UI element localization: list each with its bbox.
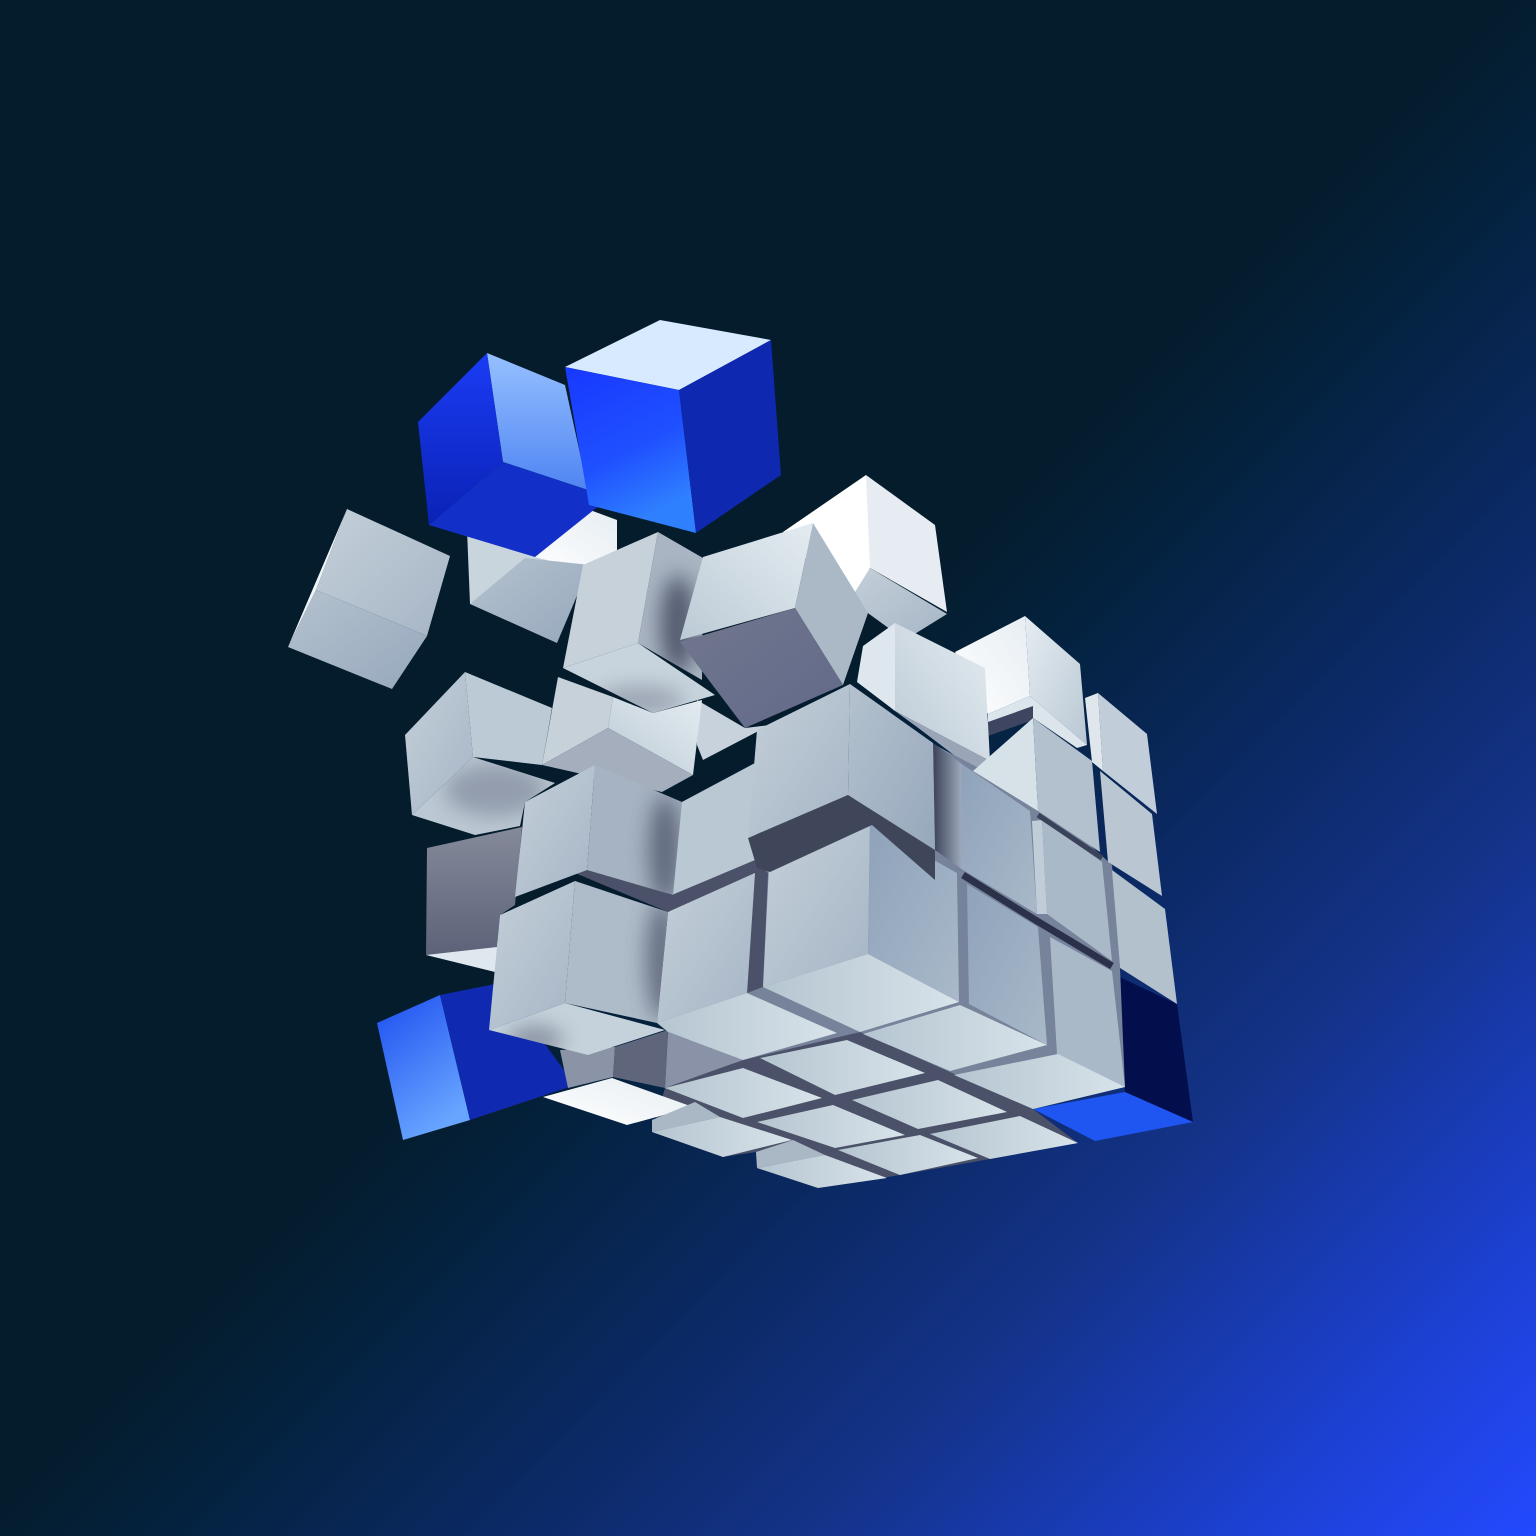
bottom grid of cube faces <box>543 993 1125 1188</box>
bottom grid gap backing <box>652 1032 1078 1188</box>
cube: white back right <box>783 475 947 640</box>
cube: lower left column <box>657 873 755 1023</box>
cube: blue upper left <box>418 353 600 557</box>
cube: blue top <box>565 320 781 533</box>
cube: far right edge top <box>1085 693 1157 814</box>
cube: large tilted with dark underside <box>680 523 868 728</box>
main cube right columns <box>963 815 1125 1087</box>
cube: left upper front <box>515 765 682 905</box>
cube: left middle column <box>672 763 757 895</box>
cube: navy back corner <box>1033 975 1193 1141</box>
cube: silver right of centre <box>857 623 990 771</box>
cube: central large <box>763 824 959 1032</box>
cube: small rear fragment <box>697 700 770 760</box>
cube: silver mid fragment <box>542 677 702 792</box>
cube: silver mid left <box>405 672 555 835</box>
cube: dark shaded left <box>426 827 522 972</box>
cube: far right upper white <box>955 616 1087 748</box>
cube: left lower front <box>489 881 678 1055</box>
cube: silver with shaded centre <box>563 532 715 714</box>
cube: upper right stack <box>933 718 1177 1004</box>
cube: blue lower left <box>377 983 575 1140</box>
cube: upper centre large <box>748 684 935 880</box>
cubes under the left column <box>560 1030 743 1088</box>
cube: behind blue cubes <box>467 510 617 643</box>
dark gap backing of main cube <box>657 745 1125 1109</box>
cube: far upper left silver <box>288 509 450 689</box>
dark gap: left column band <box>575 860 768 993</box>
